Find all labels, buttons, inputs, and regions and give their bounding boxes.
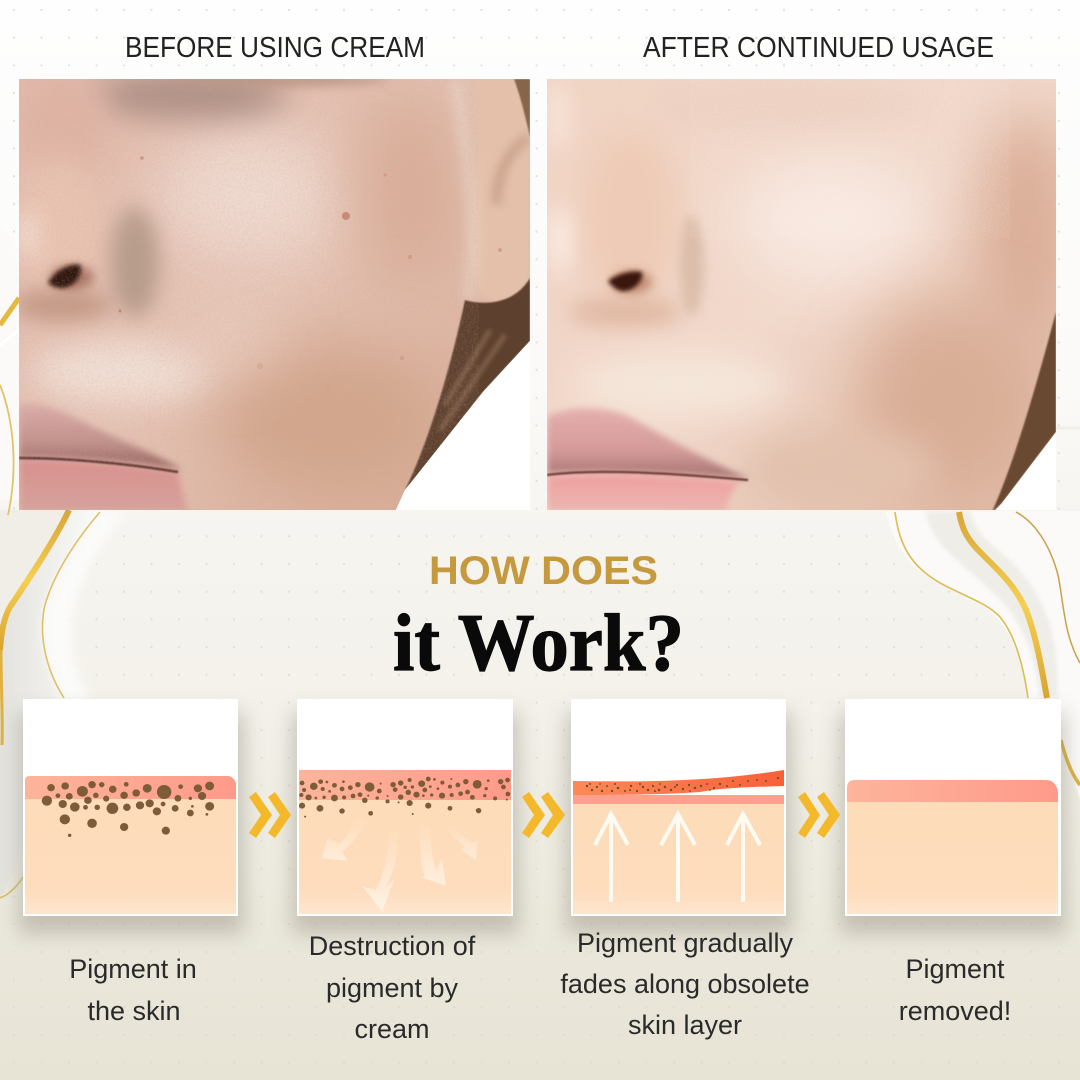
- heading: after: AFTER CONTINUED USAGE: [643, 32, 994, 64]
- nostril: [612, 271, 652, 293]
- panel: pigment removed: [845, 699, 1061, 916]
- photo: skin after continued usage: [547, 79, 1070, 512]
- caption: step 2: pigment by: [326, 973, 459, 1003]
- hair: [405, 278, 530, 490]
- fine pigment dots: [586, 777, 779, 792]
- caption: step 2: Destruction of: [309, 931, 476, 961]
- caption: step 1: Pigment in: [69, 954, 197, 984]
- heading: it work: it Work?: [393, 597, 684, 688]
- arrow: step 1 to 2: [249, 792, 291, 838]
- panel: pigment fades along obsolete layer: [571, 699, 786, 916]
- caption: step 4: Pigment: [905, 954, 1005, 984]
- caption: step 1: the skin: [87, 996, 181, 1026]
- arrow: step 3 to 4: [798, 792, 840, 838]
- caption: step 3: [560, 928, 810, 1040]
- caption: step 4: [899, 954, 1011, 1026]
- panel: destruction of pigment: [297, 699, 513, 916]
- caption: step 3: fades along obsolete: [560, 969, 810, 999]
- jaw contour and ear: [482, 82, 528, 300]
- card shadows: [18, 712, 1066, 934]
- pigment dots: [42, 781, 214, 837]
- nose: [38, 160, 78, 200]
- decorative gold waves left: [0, 225, 125, 900]
- lips: [547, 408, 750, 479]
- arrow: step 2 to 3: [522, 792, 565, 838]
- decorative gold waves right: [885, 428, 1080, 800]
- pigment dots: [299, 777, 510, 818]
- heading: how does: HOW DOES: [429, 549, 658, 593]
- caption: step 4: removed!: [899, 996, 1011, 1026]
- caption: step 2: cream: [354, 1014, 430, 1044]
- heading: before: BEFORE USING CREAM: [125, 32, 425, 64]
- photo: skin before using cream: [12, 70, 530, 512]
- white cut-out: [395, 341, 530, 512]
- caption: step 3: Pigment gradually: [577, 928, 794, 958]
- caption: step 3: skin layer: [628, 1010, 742, 1040]
- up arrows: [595, 814, 760, 902]
- caption: step 2: [309, 931, 476, 1044]
- hair: [992, 312, 1056, 512]
- nostril: [50, 265, 94, 289]
- panel: pigment in the skin: [23, 699, 238, 916]
- skin spots: [118, 156, 502, 369]
- white cut-out: [994, 432, 1056, 512]
- faint white arrows: [322, 818, 478, 912]
- lips: [19, 404, 182, 470]
- caption: step 1: [69, 954, 197, 1026]
- nose: [582, 136, 680, 295]
